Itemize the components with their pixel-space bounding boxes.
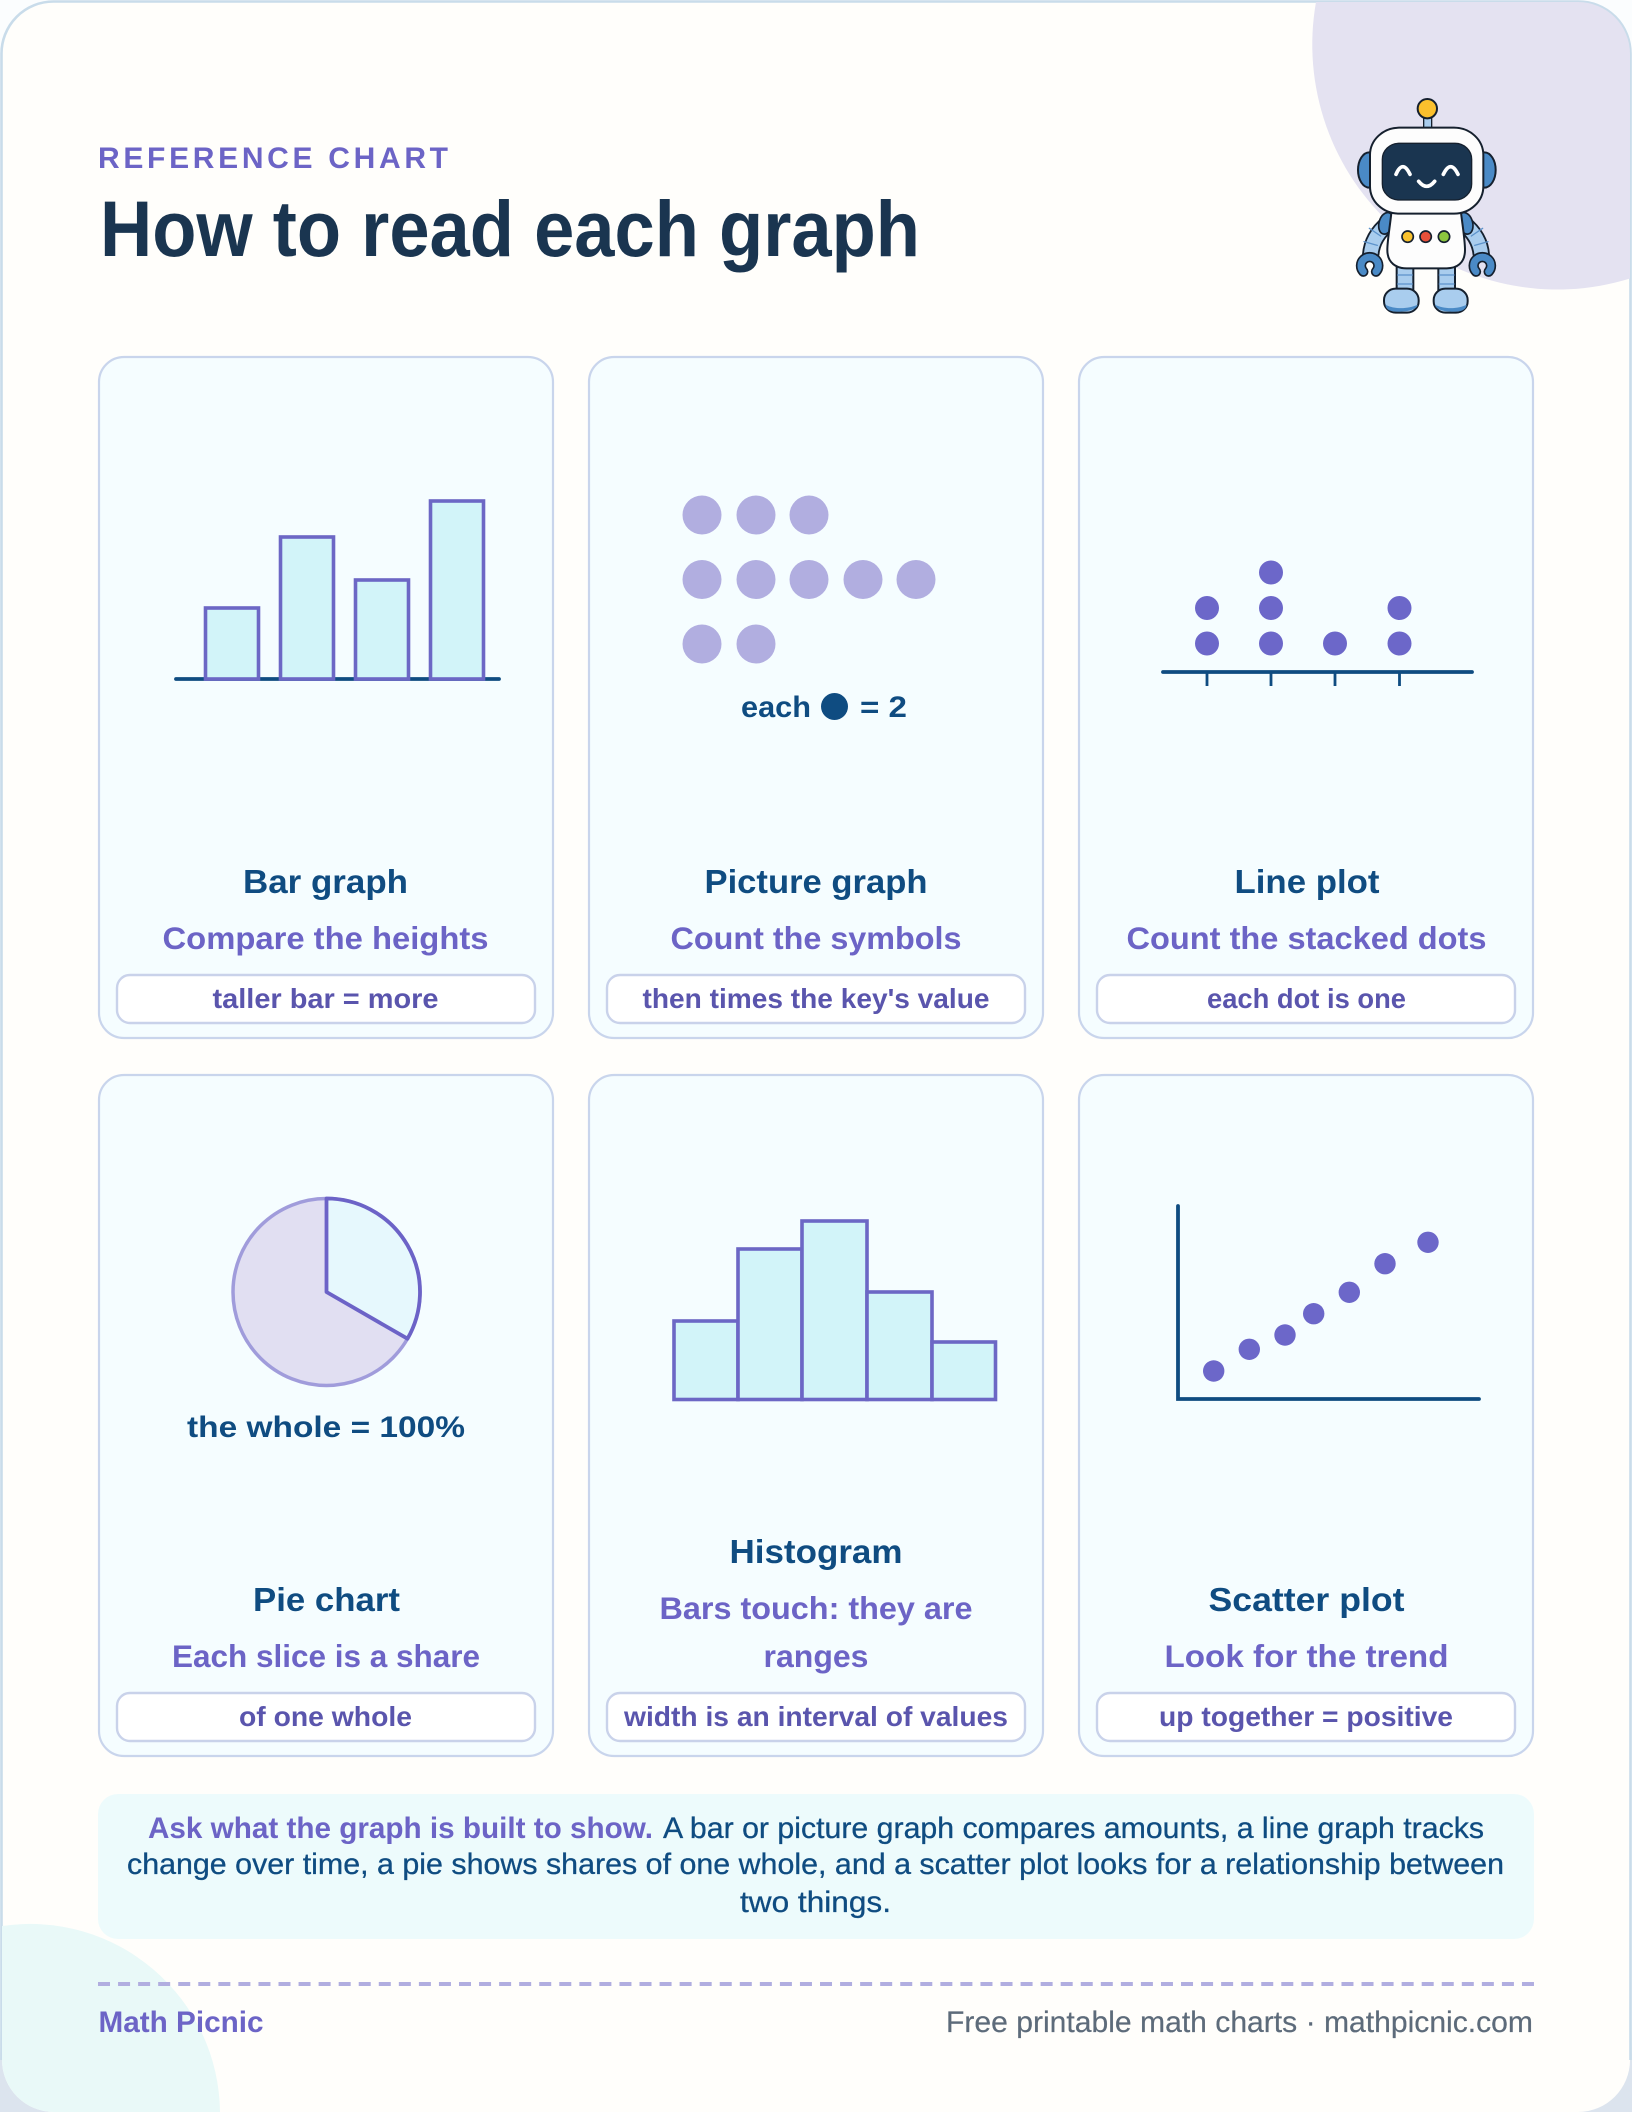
pill note — [607, 975, 1025, 1023]
panel: histogram — [589, 1075, 1043, 1756]
picture graph symbols — [682, 496, 936, 664]
pill note: taller bar = more — [212, 983, 438, 1014]
card title: Line plot — [1234, 864, 1380, 901]
card subtitle: Bars touch: they are — [660, 1590, 972, 1626]
decorative circle: top right — [1312, 2, 1630, 290]
card subtitle: Look for the trend — [1164, 1638, 1448, 1674]
card title: Bar graph — [243, 864, 408, 901]
decorative circle: bottom left — [2, 1924, 220, 2112]
panel: picture graph — [589, 357, 1043, 1038]
line plot chart — [1163, 560, 1472, 686]
icon: robot mascot — [1358, 99, 1496, 313]
callout: summary: A bar or picture graph compares amounts, a line graph tracks — [663, 1812, 1484, 1845]
scatter chart — [1178, 1206, 1479, 1399]
bar chart — [176, 501, 499, 679]
panel: pie chart — [99, 1075, 553, 1756]
card subtitle: Count the symbols — [670, 920, 962, 956]
card title: Pie chart — [253, 1582, 400, 1619]
panel: bar graph — [99, 357, 553, 1038]
callout: summary: Ask what the graph is built to show. — [148, 1812, 653, 1845]
pie chart label: the whole = 100% — [187, 1411, 465, 1444]
picture graph key — [741, 691, 907, 724]
card subtitle: ranges — [764, 1638, 868, 1674]
card subtitle: Each slice is a share — [172, 1638, 480, 1674]
callout: summary: change over time, a pie shows shares of one whole, and a scatter plot looks for a relationship between — [127, 1848, 1504, 1881]
pill note — [1097, 975, 1515, 1023]
title: How to read each graph — [100, 184, 920, 273]
footer note: Free printable math charts · mathpicnic.com — [946, 2006, 1533, 2039]
callout: summary: two things. — [740, 1886, 891, 1919]
callout: summary — [98, 1794, 1534, 1939]
pill note: of one whole — [239, 1701, 412, 1732]
card subtitle: Count the stacked dots — [1126, 920, 1486, 956]
pill note: width is an interval of values — [623, 1701, 1008, 1732]
pill note — [117, 1693, 535, 1741]
card title: Scatter plot — [1208, 1582, 1404, 1619]
pie chart graphic — [233, 1198, 420, 1386]
card title: Picture graph — [704, 864, 928, 901]
pill note — [117, 975, 535, 1023]
card subtitle — [660, 1590, 972, 1674]
histogram chart — [674, 1221, 996, 1400]
picture graph key: each — [741, 691, 811, 724]
pill note — [1097, 1693, 1515, 1741]
card title: Histogram — [730, 1534, 902, 1571]
footer brand: Math Picnic — [98, 2006, 264, 2039]
eyebrow: REFERENCE CHART — [98, 142, 448, 175]
panel: scatter plot — [1079, 1075, 1533, 1756]
pill note: then times the key's value — [642, 983, 990, 1014]
panel: line plot — [1079, 357, 1533, 1038]
pill note: each dot is one — [1207, 983, 1406, 1014]
pill note — [607, 1693, 1025, 1741]
pill note: up together = positive — [1159, 1701, 1453, 1732]
card subtitle: Compare the heights — [162, 920, 489, 956]
picture graph key: = 2 — [860, 691, 907, 724]
